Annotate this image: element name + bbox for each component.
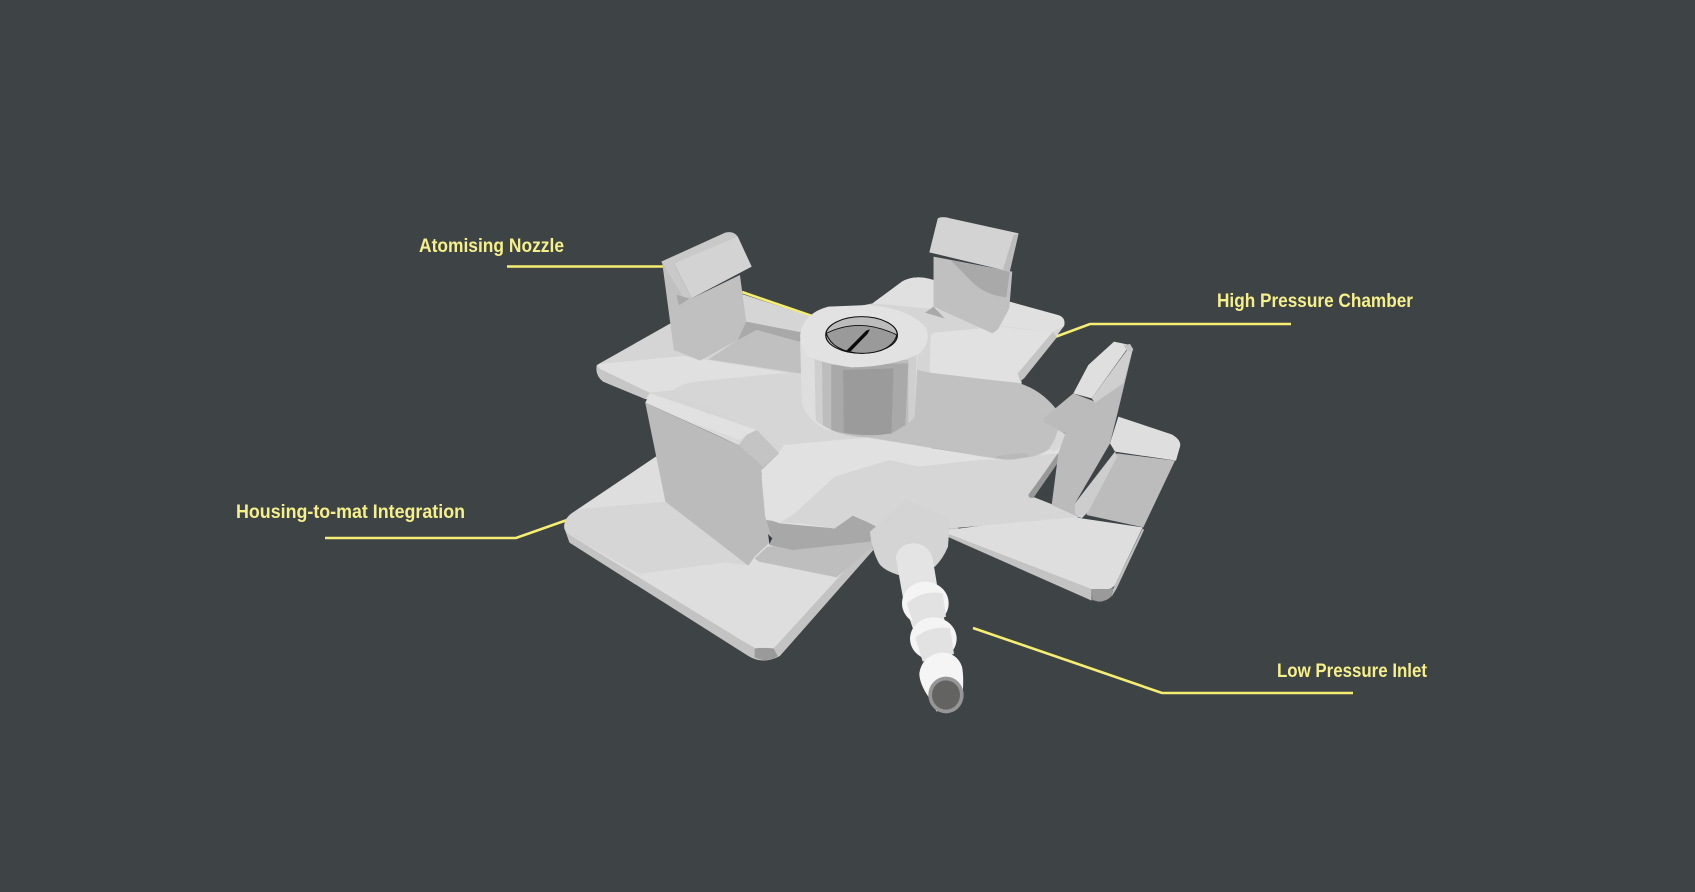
nozzle housing post: rear left: [661, 232, 752, 361]
hose bead 1 inner: [907, 592, 946, 628]
low pressure inlet hose: [870, 500, 964, 713]
chamber floor: [675, 360, 1066, 460]
hose bead 2 inner: [915, 628, 954, 662]
callout: housing-to-mat integration: [236, 502, 567, 538]
nozzle housing post: front left: [645, 393, 779, 566]
hose segment: [896, 543, 947, 630]
hose bead 1: [902, 582, 949, 625]
nozzle housing post: right fin: [1028, 342, 1133, 518]
central body: [761, 433, 1083, 528]
callout: atomising nozzle: [419, 236, 812, 316]
inlet socket: [870, 500, 950, 575]
device illustration: [564, 217, 1180, 713]
hose bead 2: [910, 617, 957, 660]
hose end collar: [919, 653, 963, 712]
callout: low pressure inlet: [973, 628, 1428, 693]
central cylinder: [800, 305, 928, 437]
callout: atomising nozzle: Atomising Nozzle: [419, 236, 564, 257]
nozzle opening: [826, 317, 897, 353]
callout: high pressure chamber: High Pressure Chamber: [1217, 291, 1414, 312]
bottom-left plate: [564, 457, 877, 660]
callout: low pressure inlet: Low Pressure Inlet: [1277, 661, 1428, 682]
right wing plate: [940, 417, 1180, 602]
upper plate: [596, 277, 1064, 457]
inlet opening: [928, 677, 964, 713]
callout: housing-to-mat integration: Housing-to-mat Integration: [236, 502, 465, 523]
callout: high pressure chamber: [1055, 291, 1414, 337]
nozzle housing post: rear right: [925, 217, 1019, 333]
